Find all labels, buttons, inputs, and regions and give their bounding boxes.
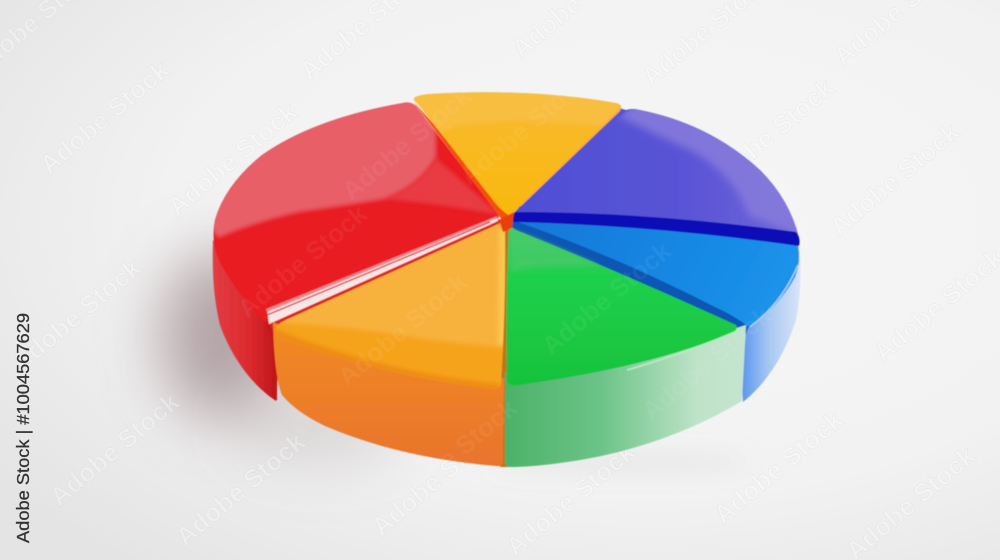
wedge: orange side: [273, 322, 504, 466]
watermarks: Adobe Stock: [162, 96, 303, 222]
watermarks: Adobe Stock: [824, 116, 965, 242]
watermarks: Adobe Stock: [44, 386, 185, 512]
watermarks: Adobe Stock: [500, 436, 641, 560]
cast shadow: [160, 250, 750, 469]
stock id label: Adobe Stock | #1004567629: [13, 313, 33, 543]
watermarks over the pie: Adobe Stock: [332, 266, 473, 392]
watermarks over the pie: Adobe Stock: [232, 198, 373, 324]
watermarks over the pie: Adobe Stock: [536, 235, 677, 361]
watermarks over the pie: Adobe Stock: [336, 80, 477, 206]
center seam backing: [500, 225, 509, 467]
wedge: purple: [506, 100, 810, 246]
watermarks over the pie: [232, 65, 777, 518]
wedge: blue side: [738, 245, 800, 402]
watermarks: Adobe Stock: [170, 426, 311, 552]
watermarks: Adobe Stock: [6, 252, 147, 378]
watermarks over the pie: Adobe Stock: [636, 300, 777, 426]
wedge: blue: [510, 222, 799, 345]
wedge: orange: [268, 223, 510, 395]
wedge: green: [506, 227, 742, 386]
watermarks: Adobe Stock: [708, 404, 849, 530]
center joint: [499, 212, 514, 232]
wedge: green side: [505, 325, 746, 467]
watermarks over the pie: Adobe Stock: [454, 65, 595, 191]
pie chart: [190, 85, 810, 467]
watermarks: Adobe Stock: [366, 416, 507, 542]
wedge: red: [190, 90, 503, 401]
watermarks: Adobe Stock: [34, 54, 175, 180]
wedge: yellow: [413, 91, 622, 220]
gloss strip: [268, 219, 503, 338]
watermarks over the pie: Adobe Stock: [382, 392, 523, 518]
watermarks: Adobe Stock: [699, 72, 840, 198]
